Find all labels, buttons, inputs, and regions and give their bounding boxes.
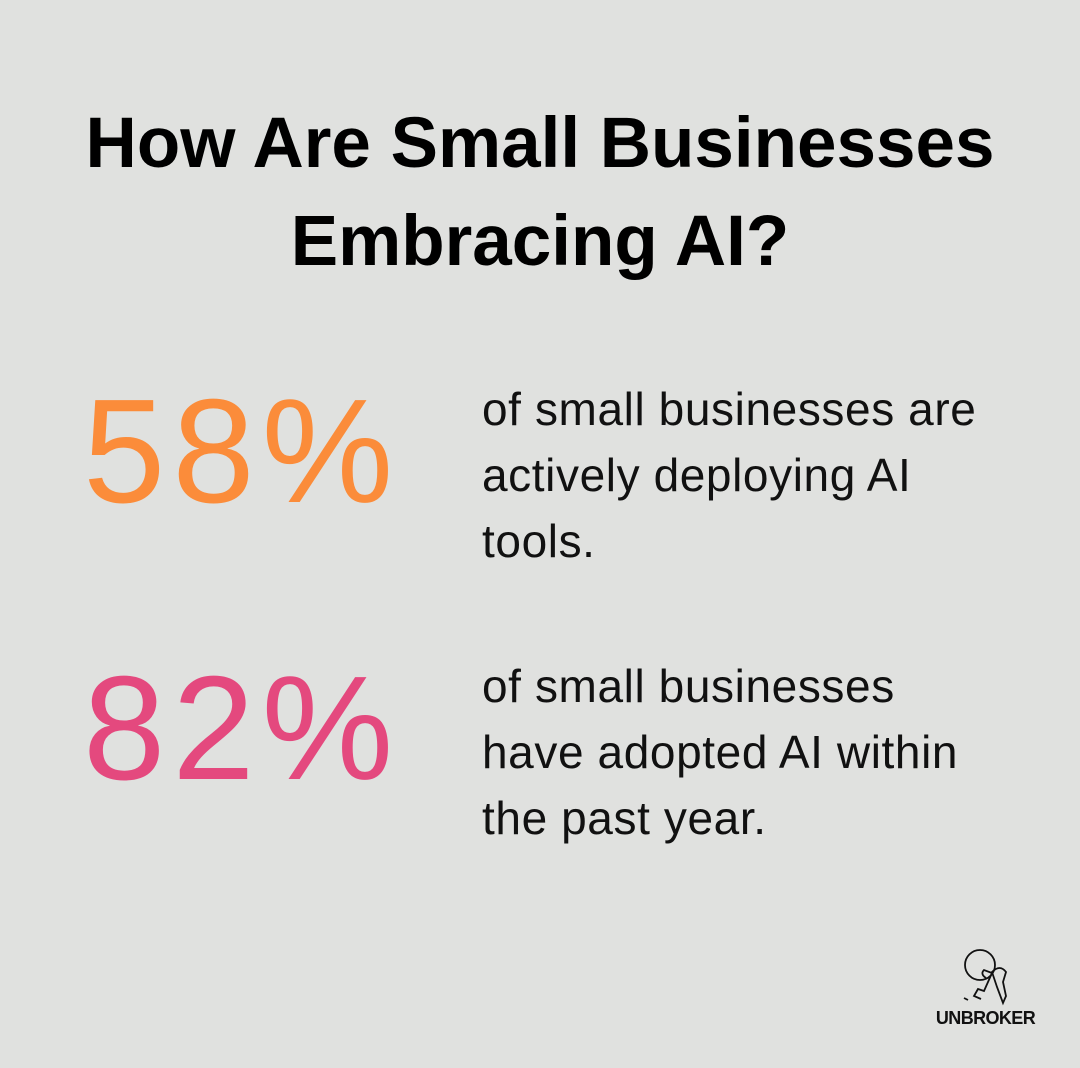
text: 82% description: the past year. (482, 792, 767, 844)
text: 58% description: of small businesses are (482, 383, 976, 435)
text: 82% description: of small businesses (482, 660, 895, 712)
text: 58% description: tools. (482, 515, 596, 567)
stat: 82%: 82% (83, 646, 400, 811)
text: 82% description (482, 660, 958, 844)
title (86, 104, 994, 281)
text: 82% description: have adopted AI within (482, 726, 958, 778)
text: 58% description: actively deploying AI (482, 449, 911, 501)
icon: keys (964, 949, 1007, 1006)
title: Embracing AI? (291, 202, 789, 281)
stat: 58%: 58% (83, 369, 400, 534)
text: UNBROKER: UNBROKER (936, 1008, 1035, 1028)
logo: unbroker (936, 949, 1036, 1028)
text: 58% description (482, 383, 976, 567)
title: How Are Small Businesses (86, 104, 994, 183)
